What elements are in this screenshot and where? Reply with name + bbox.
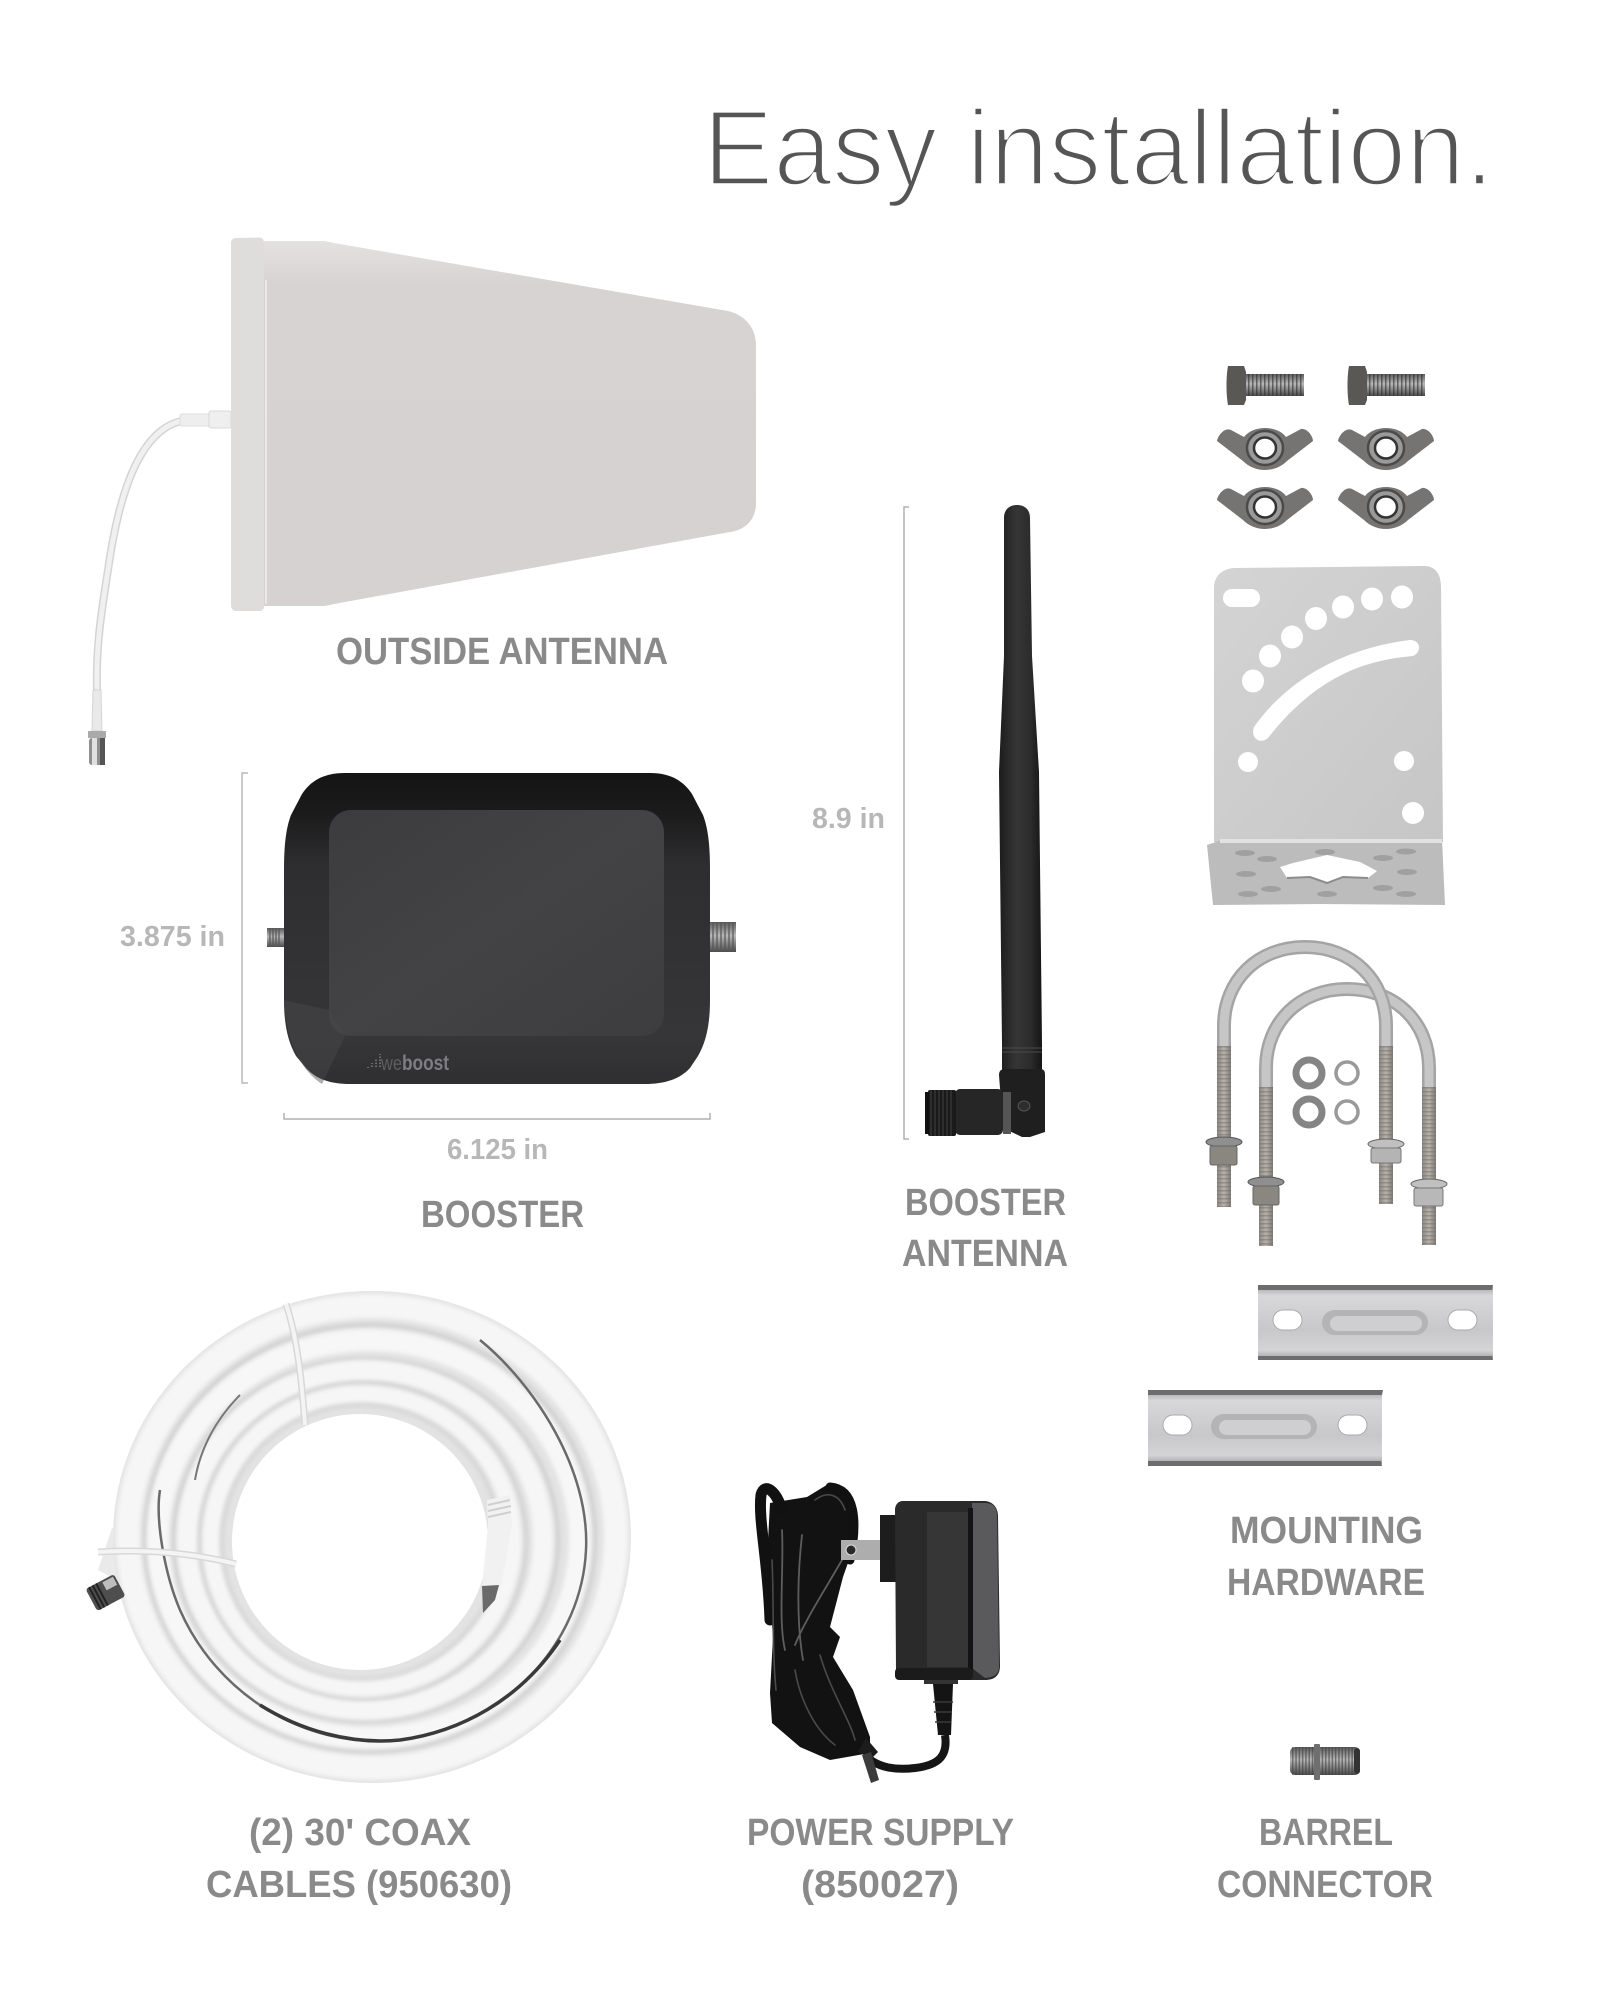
booster logo: boost bbox=[402, 1052, 449, 1075]
label: power supply bbox=[747, 1812, 1014, 1906]
adapter strain relief and lead bbox=[858, 1680, 958, 1783]
booster dimension: width: 6.125 in bbox=[447, 1134, 548, 1166]
label: mounting hardware bbox=[1227, 1510, 1425, 1604]
booster case bbox=[284, 773, 710, 1084]
booster logo: we bbox=[380, 1053, 402, 1075]
label: booster: BOOSTER bbox=[421, 1194, 584, 1236]
label: booster antenna: BOOSTER bbox=[905, 1182, 1066, 1224]
coax cable coil bbox=[86, 1291, 631, 1783]
antenna housing bbox=[264, 241, 756, 606]
antenna pigtail cable bbox=[88, 411, 231, 765]
antenna SMA connector bbox=[955, 1089, 1003, 1135]
dark gap between cable loops bbox=[159, 1340, 586, 1741]
label: barrel connector: BARREL bbox=[1259, 1812, 1393, 1854]
coil loops bbox=[128, 1306, 616, 1768]
label: mounting hardware: HARDWARE bbox=[1227, 1562, 1425, 1604]
booster dimension: height bbox=[120, 773, 248, 1083]
label: coax cables: (2) 30' COAX bbox=[249, 1812, 472, 1854]
label: coax cables bbox=[206, 1812, 512, 1906]
label: power supply: POWER SUPPLY bbox=[747, 1812, 1014, 1854]
cable tie horizontal bbox=[98, 1551, 236, 1564]
label: coax cables: CABLES (950630) bbox=[206, 1864, 512, 1906]
coil body bbox=[113, 1291, 631, 1783]
power cord bundle bbox=[760, 1483, 870, 1760]
antenna hinge collar bbox=[999, 1069, 1045, 1137]
cable tie vertical bbox=[286, 1304, 305, 1425]
mounting hardware: u-bolts bbox=[1206, 947, 1447, 1246]
label: booster antenna bbox=[902, 1182, 1068, 1275]
coil centre opening bbox=[232, 1414, 488, 1670]
front u-bolt bbox=[1206, 947, 1404, 1207]
rear u-bolt bbox=[1248, 989, 1447, 1246]
booster top plate bbox=[329, 810, 664, 1036]
title: Easy installation. bbox=[703, 87, 1494, 208]
adapter prong bbox=[841, 1515, 896, 1582]
antenna flange bbox=[231, 238, 264, 611]
booster connectors bbox=[267, 922, 736, 952]
label: booster antenna: ANTENNA bbox=[902, 1233, 1068, 1275]
mounting hardware: angle bracket bbox=[1207, 566, 1445, 905]
adapter body bbox=[895, 1501, 1000, 1680]
booster antenna dimension bbox=[812, 507, 909, 1139]
bracket foot bbox=[1207, 839, 1445, 905]
booster dimension: height: 3.875 in bbox=[120, 921, 225, 953]
washers bbox=[1296, 1060, 1358, 1125]
booster logo bbox=[368, 1052, 449, 1075]
power supply bbox=[760, 1483, 1000, 1783]
label: mounting hardware: MOUNTING bbox=[1230, 1510, 1423, 1552]
cable end boot and connector bbox=[482, 1495, 512, 1590]
F connector bbox=[86, 1574, 126, 1611]
mounting hardware: upper strap plate bbox=[1258, 1285, 1493, 1360]
mounting hardware: bolts bbox=[1226, 366, 1425, 405]
connector boot behind coil bbox=[98, 1528, 130, 1580]
booster unit bbox=[267, 773, 736, 1084]
label: barrel connector bbox=[1217, 1812, 1433, 1906]
booster antenna dimension: 8.9 in bbox=[812, 803, 885, 835]
label: outside antenna: OUTSIDE ANTENNA bbox=[336, 631, 668, 673]
booster dimension: width bbox=[284, 1113, 710, 1166]
mounting hardware: wing nuts bbox=[1217, 428, 1434, 529]
mounting hardware: lower strap plate bbox=[1148, 1390, 1383, 1466]
barrel connector bbox=[1290, 1744, 1360, 1780]
label: power supply: (850027) bbox=[801, 1864, 959, 1906]
label: barrel connector: CONNECTOR bbox=[1217, 1864, 1433, 1906]
booster antenna bbox=[925, 505, 1045, 1137]
outside antenna product bbox=[88, 238, 756, 765]
